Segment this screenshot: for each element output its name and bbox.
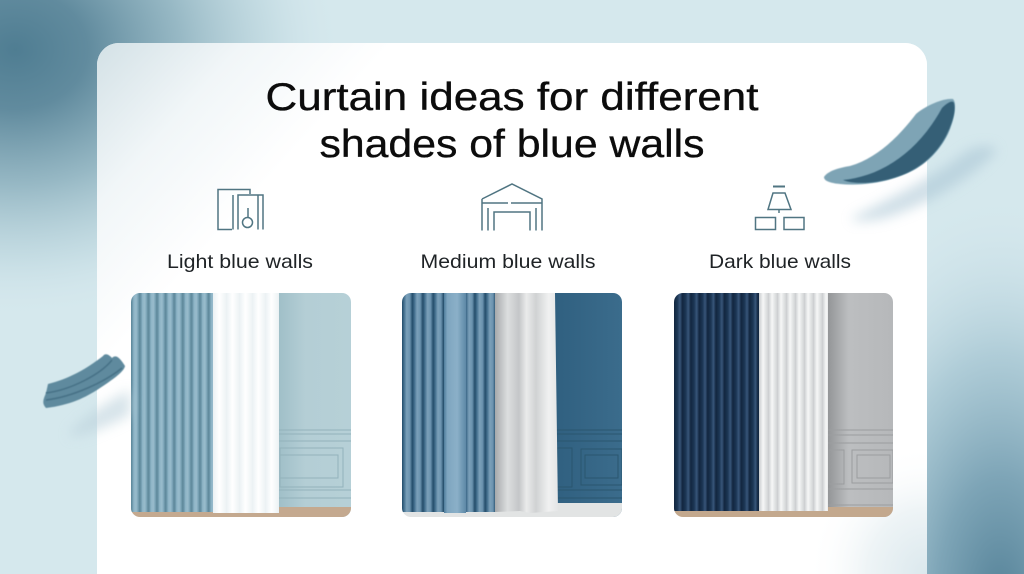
icon: dark blue walls: [756, 186, 804, 230]
navy drape: [674, 293, 759, 511]
icon: light blue walls: [218, 190, 263, 230]
medium wall: [550, 293, 622, 517]
medium floor: [402, 503, 622, 517]
label: medium blue walls: Medium blue walls: [420, 251, 596, 273]
label: light blue walls: Light blue walls: [167, 251, 313, 273]
dark floor: [674, 507, 893, 517]
label: dark blue walls: Dark blue walls: [709, 251, 851, 273]
decoration: left curtain swatch: [43, 354, 130, 437]
light wall: [275, 293, 351, 517]
title: [266, 76, 759, 166]
light blue drape: [131, 293, 213, 512]
swatch body: [824, 99, 955, 185]
grey wall: [825, 293, 893, 517]
white drape: [495, 293, 558, 513]
swatch shadow: [70, 390, 130, 437]
sheer white drape: [213, 293, 279, 513]
title: Curtain ideas for different: [266, 76, 759, 119]
panel: light blue curtains photo: [131, 293, 351, 517]
icon: medium blue walls: [482, 184, 542, 230]
medium blue drape: [402, 293, 495, 512]
panel: white card: [97, 43, 927, 574]
broad pleat: [444, 293, 466, 513]
decoration: top right curtain swatch: [824, 99, 996, 221]
white pleated drape: [759, 293, 828, 511]
swatch body: [43, 354, 125, 408]
light floor: [131, 507, 351, 517]
panel: medium blue curtains photo: [402, 293, 622, 517]
title: shades of blue walls: [320, 123, 704, 166]
swatch shadow: [851, 146, 996, 221]
swatch inner fold: [843, 102, 955, 183]
panel: dark blue curtains photo: [674, 293, 893, 517]
swatch folds: [46, 360, 122, 400]
